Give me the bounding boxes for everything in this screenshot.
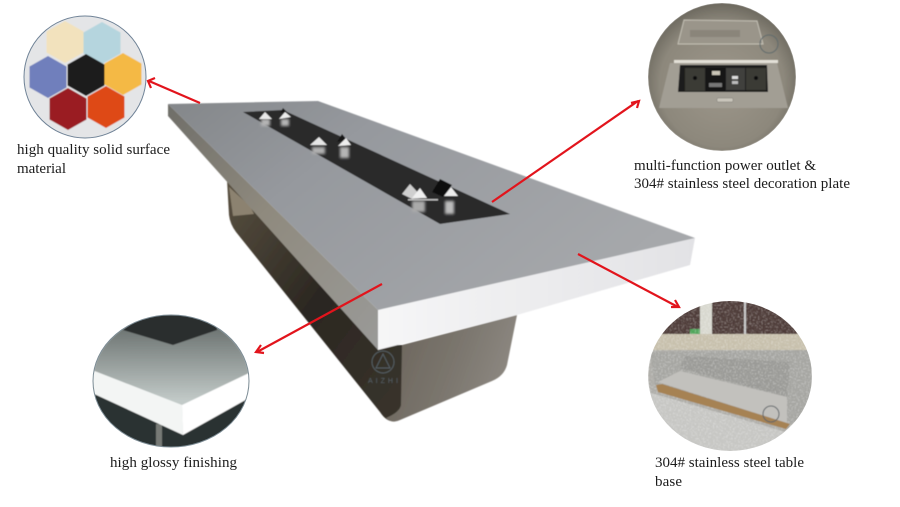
label: base: base [655,474,682,490]
circle: outlet photo [648,3,796,151]
plate handle [717,98,733,102]
table top: side edge [168,104,378,350]
circle outline [93,315,249,447]
label: steel plate: 304# stainless steel decoration plate [634,176,850,192]
wrapped crate [650,350,812,425]
panel: glossy finishing [92,315,249,471]
table top: front white edge [378,238,695,350]
table base: front steel panel [386,315,517,422]
hexagon: black [68,54,104,96]
panel: solid surface material [17,16,170,177]
hexagon: light blue [84,22,120,64]
panel: stainless steel base [648,300,812,490]
watermark logo on base [368,351,401,385]
circle: steel base photo [648,300,812,460]
label: glossy: high glossy finishing [110,455,238,471]
watermark logo on base: AIZHI [368,378,401,385]
hexagon: orange [88,86,124,128]
table base: dark side panel [227,180,404,421]
pop-up outlets group 2 [310,134,351,158]
wooden pallet [656,384,790,429]
socket opening [678,65,768,92]
hexagon: cream [46,21,84,63]
circle outline [24,16,146,138]
arrow: to power outlet [492,101,639,202]
pop-up outlets group 3 [402,179,458,214]
white edge left [92,370,183,435]
underside [95,394,246,446]
watermark [760,35,778,53]
floor [651,392,784,450]
label: power outlet: multi-function power outlet & [634,158,816,174]
arrow: to solid surface [148,78,200,103]
sockets [685,68,766,91]
label: material: material [17,161,66,177]
table base: tan reflection [229,187,254,216]
watermark [763,406,779,422]
closed outlet plate [678,20,763,44]
crate inner back wall [680,356,790,397]
label: solid surface: high quality solid surface [17,142,170,158]
table top: surface [168,101,695,310]
white edge right [182,373,249,435]
back wall ledge [648,334,812,350]
background wall [662,301,798,335]
pop-up outlets group 1 [259,108,291,126]
central cable tray [243,110,510,224]
label: table base: 304# stainless steel table [655,455,804,471]
circle: colored hexagon samples [24,16,146,138]
table illustration [168,101,695,422]
panel: power outlet [634,3,850,192]
hexagon: red [50,88,86,130]
open plate [659,63,788,108]
steel panel [658,371,787,423]
concrete grain [648,300,812,460]
circle: glossy edge close-up [92,315,249,450]
hexagon: periwinkle [30,56,66,98]
arrow: to glossy finishing [256,284,382,353]
dark tray corner [123,315,217,345]
arrow: to table base [578,254,679,307]
hexagon: yellow [104,53,142,95]
